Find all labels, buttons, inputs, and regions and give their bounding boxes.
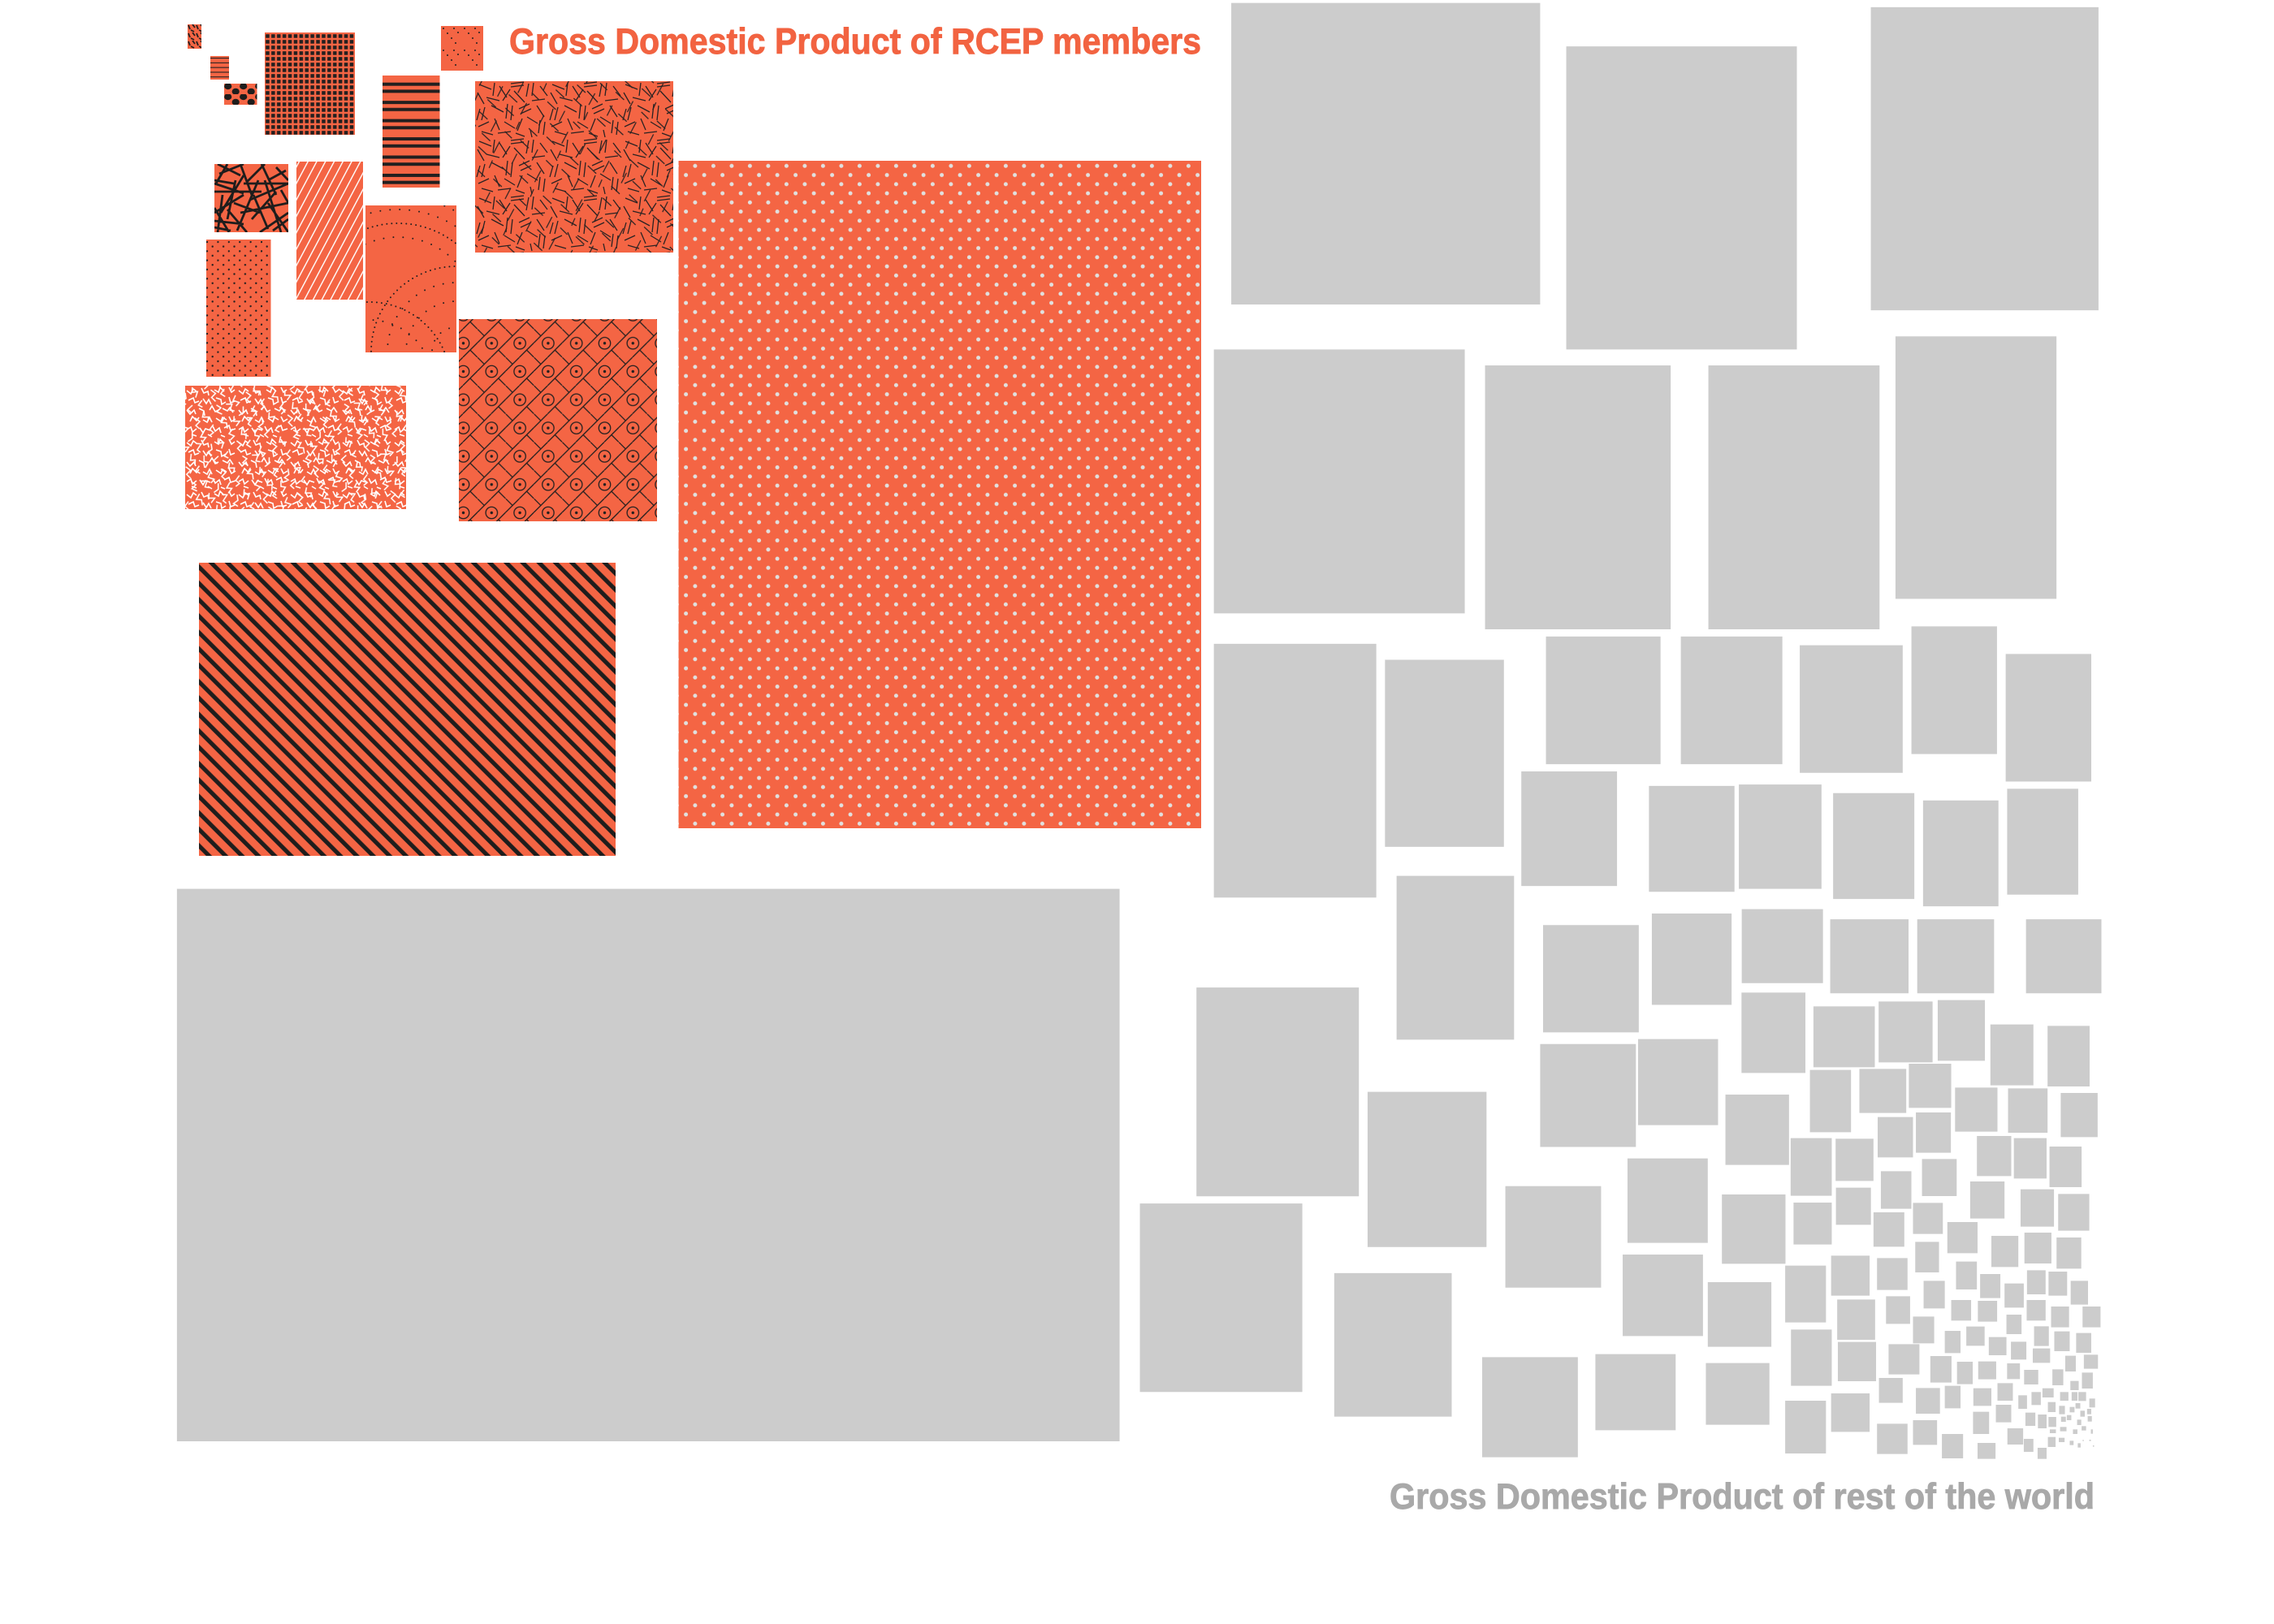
block: dash pattern	[475, 81, 673, 253]
title: rest of the world: Gross Domestic Product of rest of the world	[1390, 1477, 2095, 1517]
block: sparse diagonal dots	[441, 26, 483, 71]
treemap: RCEP member economies	[185, 24, 1201, 856]
block: horizontal bars	[383, 76, 440, 188]
block: white squiggle pattern	[185, 386, 406, 509]
treemap: rest of the world economies	[177, 3, 2101, 1459]
treemap infographic	[177, 3, 2102, 1510]
block: dark grid	[265, 32, 355, 135]
block: random sticks	[214, 164, 288, 232]
block: largest RCEP economy, dotted pattern	[679, 161, 1201, 828]
block: dark ovals	[224, 84, 257, 105]
block: tiny dashes	[188, 24, 201, 49]
medium grey blocks	[1628, 992, 2098, 1272]
block: small dots pattern	[206, 240, 271, 377]
small grey blocks	[1595, 1255, 2100, 1459]
title: RCEP members: Gross Domestic Product of RCEP members	[509, 22, 1201, 62]
block: second RCEP economy, diagonal stripes	[199, 563, 616, 856]
block: eye and lattice pattern	[459, 319, 657, 521]
large grey blocks	[177, 3, 2101, 1458]
block: dotted arcs pattern	[365, 205, 456, 352]
block: white diagonal hatch	[296, 162, 363, 300]
block: thin stripes	[210, 56, 229, 80]
